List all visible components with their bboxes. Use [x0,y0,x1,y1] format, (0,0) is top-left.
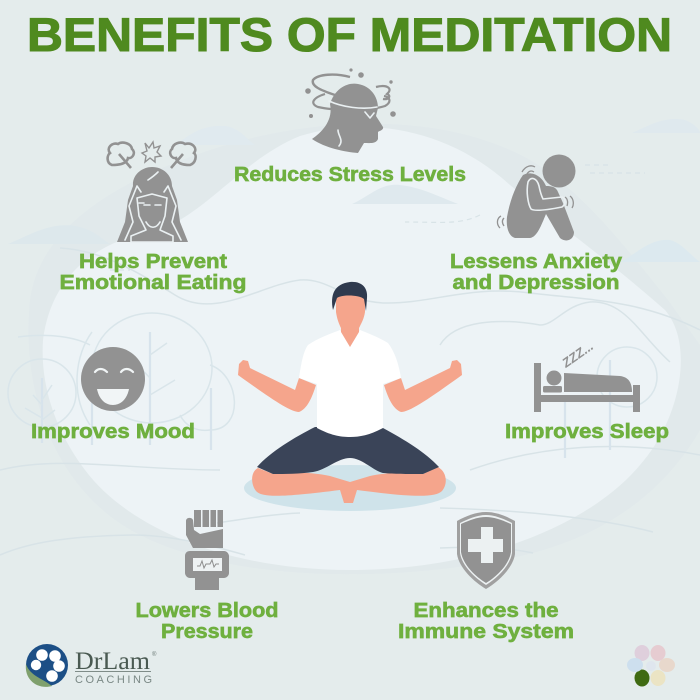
label: immune system: Immune System [398,620,574,643]
logo wordmark: DrLam [75,648,151,675]
neck and face [336,295,365,347]
label: immune system [398,599,574,643]
arms [238,360,462,412]
icon: corner flower [627,645,675,686]
icon: person sleeping in bed: ZZZ... [558,338,596,371]
meditating figure [238,282,462,511]
icon: stressed head with steam [108,142,196,242]
icon: wrist with heart-rate watch [185,510,229,590]
mat [244,465,456,511]
shorts [257,427,439,474]
icon: dizzy head with spinning rings [305,68,396,153]
label: immune system: Enhances the [414,599,558,622]
label: blood pressure: Lowers Blood [136,599,278,622]
label: improves sleep: Improves Sleep [505,420,669,443]
hair [332,282,367,311]
title: BENEFITS OF MEDITATION [27,8,672,61]
legs [252,467,446,503]
label: emotional eating: Helps Prevent [79,250,227,273]
shirt [299,330,401,437]
label: emotional eating: Emotional Eating [60,271,246,294]
icon: shield with cross [457,512,515,589]
label: anxiety and depression [450,250,623,294]
icon: person sleeping in bed [534,338,640,412]
logo: DrLam Coaching [26,644,157,687]
label: emotional eating [60,250,246,294]
label: blood pressure: Pressure [161,620,253,643]
logo: DrLam Coaching: COACHING [75,674,152,686]
label: anxiety and depression: Lessens Anxiety [450,250,623,273]
label: blood pressure [136,599,278,643]
label: improves mood: Improves Mood [31,420,195,443]
logo: DrLam Coaching: ® [152,651,157,658]
icon: anxious seated person [497,154,576,240]
label: anxiety and depression: and Depression [452,271,620,294]
logo emblem [26,644,68,687]
icon: smiling face [81,347,145,411]
trees [8,313,657,458]
label: reduces stress: Reduces Stress Levels [234,163,466,186]
